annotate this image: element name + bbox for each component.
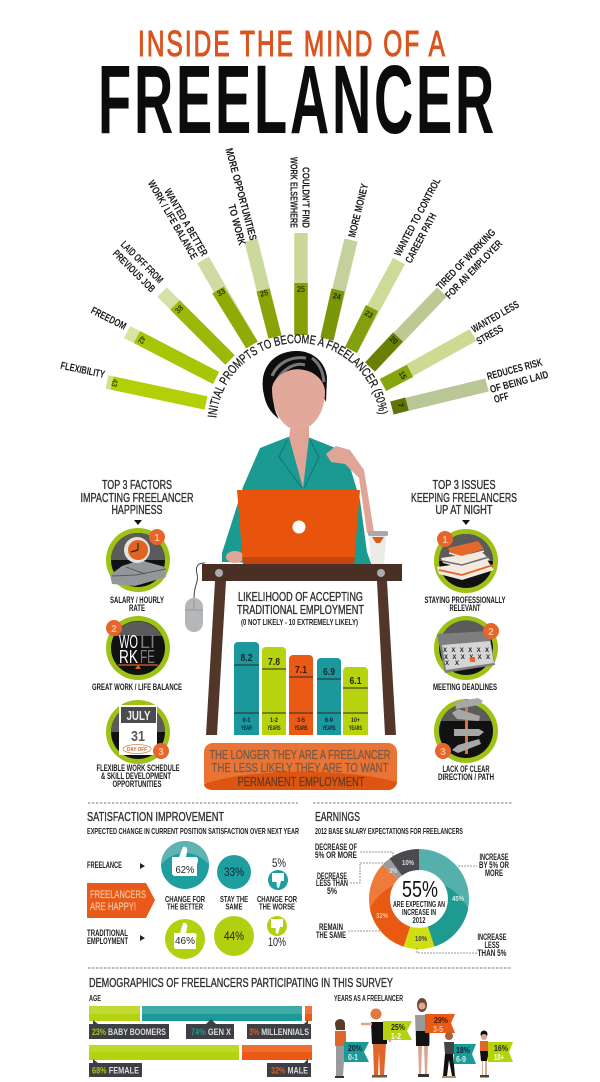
banner text: THE LONGER THEY ARE A FREELANCER [210,748,390,762]
label line 2: & SKILL DEVELOPMENT [101,771,171,781]
arc caption: INITIAL PROMPTS TO BECOME A FREELANCER (50%) [208,334,388,418]
label line 2: DIRECTION / PATH [438,772,494,782]
freelance same circle [217,855,251,889]
donut values: 10% [415,936,428,943]
bar values: 43 [109,378,120,388]
heading: UP AT NIGHT [436,503,493,517]
chart heading line 2: TRADITIONAL EMPLOYMENT [237,603,364,617]
age callouts [89,1019,311,1039]
column labels: THE WORSE [259,902,295,912]
icon: calendar july 31: JULY [126,708,151,723]
bar categories [241,718,362,732]
heading: TOP 3 FACTORS [102,478,172,492]
person 1-2: 1-2 [391,1031,401,1041]
callout: freelancers are happy [87,883,155,918]
donut labels: INCREASE [478,932,506,942]
gender callouts: 68% FEMALE [92,1066,139,1076]
traditional better circle: 46% [175,935,195,947]
heading: EARNINGS [315,810,360,824]
freelance worse: 5% [272,856,286,870]
person 0-1 [335,1019,369,1078]
icon: deadlines calendar: 2 [488,627,494,638]
traditional same circle [214,916,254,956]
person 6-9: 6-9 [456,1055,466,1064]
label: MEETING DEADLINES [433,682,497,692]
bar categories: 1-2 [270,718,279,724]
icon: clock on bricks: 1 [154,533,160,544]
bar labels [59,147,550,406]
badge [106,620,122,636]
freelance worse [268,856,288,890]
icon: work life balance: LI [140,632,155,652]
bar labels: TO WORK [225,203,248,247]
panel: likelihood chart [234,590,368,735]
donut labels: MORE [485,868,503,878]
icon: deadlines calendar: X X [445,661,459,667]
icon: work life balance: FE [140,647,155,667]
donut values: 45% [452,896,465,903]
donut labels: 5% OR MORE [315,850,357,860]
donut labels: 5% [327,886,337,896]
person 10+: 16% [494,1044,508,1053]
traditional same circle: 44% [224,929,244,943]
bar categories: YEAR [241,726,252,732]
person 10+ [480,1030,513,1078]
traditional worse [267,916,287,949]
person 3-5: 29% [434,1015,448,1025]
icon: calendar july 31: 31 [131,728,145,745]
gender bar [89,1045,312,1060]
label line 2: RATE [129,603,145,613]
bar values: 20 [388,334,400,347]
ribbon [454,1044,476,1064]
icon: deadlines calendar: X X X X X X [444,655,490,661]
column labels: CHANGE FOR [165,894,205,904]
panel: top 3 issues [411,478,517,782]
bar values: 42 [136,334,147,346]
gender callouts: 32% MALE [271,1066,308,1076]
age callouts: 23% BABY BOOMERS [92,1027,166,1037]
bars [107,233,487,408]
bar categories: YEARS [268,726,280,732]
lapels [279,440,319,488]
bar labels: OF BEING LAID [489,369,550,396]
panel: satisfaction improvement [87,810,299,959]
row label traditional line 2: EMPLOYMENT [87,936,128,946]
bar labels: REDUCES RISK [486,356,544,383]
heading [80,478,194,517]
donut labels: DECREASE [317,871,347,881]
icon: book stack: 1 [442,535,448,546]
bar categories: YEARS [294,726,308,732]
donut chart: ARE EXPECTING AN [393,900,445,909]
bar values: 25 [259,288,270,299]
leader lines [348,852,477,953]
bar labels: STRESS [474,323,506,348]
label: LACK OF CLEAR [442,764,490,774]
icon: clock on bricks [106,528,170,592]
bar values: 23 [363,309,375,321]
icon: signpost [434,698,498,763]
chart heading: LIKELIHOOD OF ACCEPTING [238,590,363,604]
heading: SATISFACTION IMPROVEMENT [87,810,224,824]
banner: longer they are a freelancer [204,743,397,790]
donut values: 10% [402,860,415,867]
donut values: 32% [376,913,389,920]
subheading: 2012 BASE SALARY EXPECTATIONS FOR FREELANCERS [315,826,463,836]
traditional worse: 10% [268,935,286,949]
freelance same circle: 33% [224,865,244,879]
badge [437,531,453,547]
bars [234,642,368,735]
left sleeve and torso [222,437,372,566]
freelancer figure [185,351,402,735]
bar values: 8.2 [240,652,253,664]
bar labels: WANTED TO CONTROL [392,176,444,258]
icon: deadlines calendar [434,616,499,680]
arrow [140,863,145,869]
label line 3: OPPORTUNITIES [112,779,162,789]
callout: freelancers are happy: ARE HAPPY! [90,901,136,913]
ribbon [488,1042,513,1062]
icon: calendar july 31: DAY OFF [127,747,148,753]
coffee cup [368,531,388,565]
bar labels: WORK ELSEWHERE [288,157,300,228]
heading: HAPPINESS [112,503,162,517]
donut labels [315,842,509,958]
bar values: 38 [173,303,186,315]
bar labels: FLEXIBILITY [59,360,106,381]
donut centre: 55% [402,876,438,902]
person 1-2 [361,1008,412,1078]
hair highlights [272,358,324,382]
heading: DEMOGRAPHICS OF FREELANCERS PARTICIPATING IN THIS SURVEY [89,976,393,990]
bar labels: WORK / LIFE BALANCE [145,178,200,262]
bar categories: 6-9 [325,718,334,724]
donut labels: THAN 5% [478,948,506,958]
bar categories: 3-5 [297,718,306,724]
icon: deadlines calendar: X X X X X X [443,648,489,654]
person 3-5 [415,998,455,1077]
donut labels: INCREASE [480,852,508,862]
donut labels: LESS THAN [316,878,348,888]
hair [263,351,327,419]
person 0-1: 0-1 [348,1053,358,1062]
label: STAYING PROFESSIONALLY [424,595,506,605]
column labels: CHANGE FOR [257,894,297,904]
age label: AGE [89,994,101,1003]
bar values: 6.9 [323,666,335,678]
banner text: THE LESS LIKELY THEY ARE TO WANT [212,761,389,775]
age callouts: 3% MILLENNIALS [249,1027,309,1037]
icon: work life balance: RK [119,647,138,667]
bar values [109,285,409,409]
subheading: EXPECTED CHANGE IN CURRENT POSITION SATISFACTION OVER NEXT YEAR [87,826,299,836]
icon: book stack [434,529,498,593]
heading [411,478,517,517]
freelance better circle [161,841,209,889]
traditional better circle [165,919,205,959]
face [272,369,325,430]
heading: KEEPING FREELANCERS [411,491,517,505]
donut labels: LESS [484,940,500,950]
bar labels: OFF [493,390,511,406]
arrow down [462,520,470,525]
bar labels: COULDN'T FIND [300,167,312,228]
ribbon [383,1021,412,1040]
age bar [89,1006,312,1021]
bar labels: FOR AN EMPLOYER [443,238,505,302]
chart subheading: (0 NOT LIKELY - 10 EXTREMELY LIKELY) [241,617,358,627]
bar categories: 10+ [351,718,360,724]
panel: demographics [89,976,513,1078]
neck [289,425,309,488]
panel: top 3 factors [80,478,194,789]
icon: work life balance: 2 [111,624,117,635]
bar values: 7.1 [295,664,307,676]
column labels: SAME [226,902,243,912]
icon: calendar july 31: 3 [158,747,164,758]
heading: IMPACTING FREELANCER [80,491,194,505]
donut labels: DECREASE OF [315,842,357,852]
bar values: 33 [216,286,227,298]
column labels [165,894,297,912]
bar values: 6.1 [350,675,362,687]
laptop [237,490,360,564]
bar values [240,652,362,687]
person 0-1: 20% [348,1044,362,1053]
donut chart: INCREASE IN [402,908,436,917]
badge [483,623,499,639]
badge [435,743,451,759]
gender callouts [89,1059,311,1077]
arrow [140,935,145,941]
panel: earnings [315,810,509,958]
title line 1: INSIDE THE MIND OF A [138,23,447,64]
arrow down [134,520,142,525]
banner text: PERMANENT EMPLOYMENT [238,775,365,789]
icon: signpost: 3 [440,747,446,758]
person 6-9 [442,1032,476,1077]
desk [202,564,402,735]
donut labels: THE SAME [316,930,346,940]
bar labels: TIRED OF WORKING [434,227,498,293]
row label traditional: TRADITIONAL [87,928,128,938]
donut labels: BY 5% OR [479,860,509,870]
label: SALARY / HOURLY [110,595,164,605]
callout: freelancers are happy: FREELANCERS [90,889,146,901]
bar labels: CAREER PATH [403,211,439,265]
bar categories: YEARS [322,726,336,732]
ribbon [425,1014,455,1033]
person 10+: 10+ [494,1053,504,1062]
ribbon [344,1042,369,1062]
donut labels: REMAIN [319,922,343,932]
column labels: STAY THE [220,894,248,904]
icon: work life balance: WO [119,632,138,652]
bar labels: WANTED LESS [470,299,521,336]
person 1-2: 25% [391,1022,405,1032]
donut chart [376,860,465,943]
bar labels: PREVIOUS JOB [110,248,158,295]
bar categories: 0-1 [242,718,251,724]
column labels: THE BETTER [167,902,203,912]
badge [149,529,165,545]
radial bar chart: initial prompts [59,147,550,418]
raised arm and hand [326,446,374,533]
icon: calendar july 31 [106,700,170,764]
label: FLEXIBLE WORK SCHEDULE [96,763,180,773]
bar values: 7.8 [268,656,280,668]
donut values: 3% [389,868,398,875]
person 6-9: 18% [456,1046,470,1055]
freelance better circle: 62% [176,864,194,876]
donut values [376,860,465,943]
bar values: 25 [297,285,305,294]
bar categories: YEARS [349,726,362,732]
bar labels: MORE OPPORTUNITIES [223,147,259,242]
bar labels: LAID OFF FROM [118,239,165,286]
bar values: 15 [397,370,409,381]
donut chart: 2012 [412,916,426,925]
bar labels: FREEDOM [89,305,128,333]
person 3-5: 3-5 [433,1024,443,1034]
title [98,23,497,154]
bar values: 24 [332,291,342,302]
icon: work life balance [106,616,170,680]
label: GREAT WORK / LIFE BALANCE [92,682,182,692]
years label: YEARS AS A FREELANCER [334,994,403,1003]
banner text [210,748,390,789]
left hand [226,551,244,563]
badge [153,743,169,759]
bar labels: WANTED A BETTER [161,187,210,259]
heading: TOP 3 ISSUES [432,478,496,492]
label line 2: RELEVANT [450,603,481,613]
row label freelance: FREELANCE [87,860,122,871]
bar values: 7 [396,402,406,409]
mouse [185,563,205,632]
bar labels: MORE MONEY [346,182,371,239]
age callouts: 74% GEN X [191,1027,231,1037]
